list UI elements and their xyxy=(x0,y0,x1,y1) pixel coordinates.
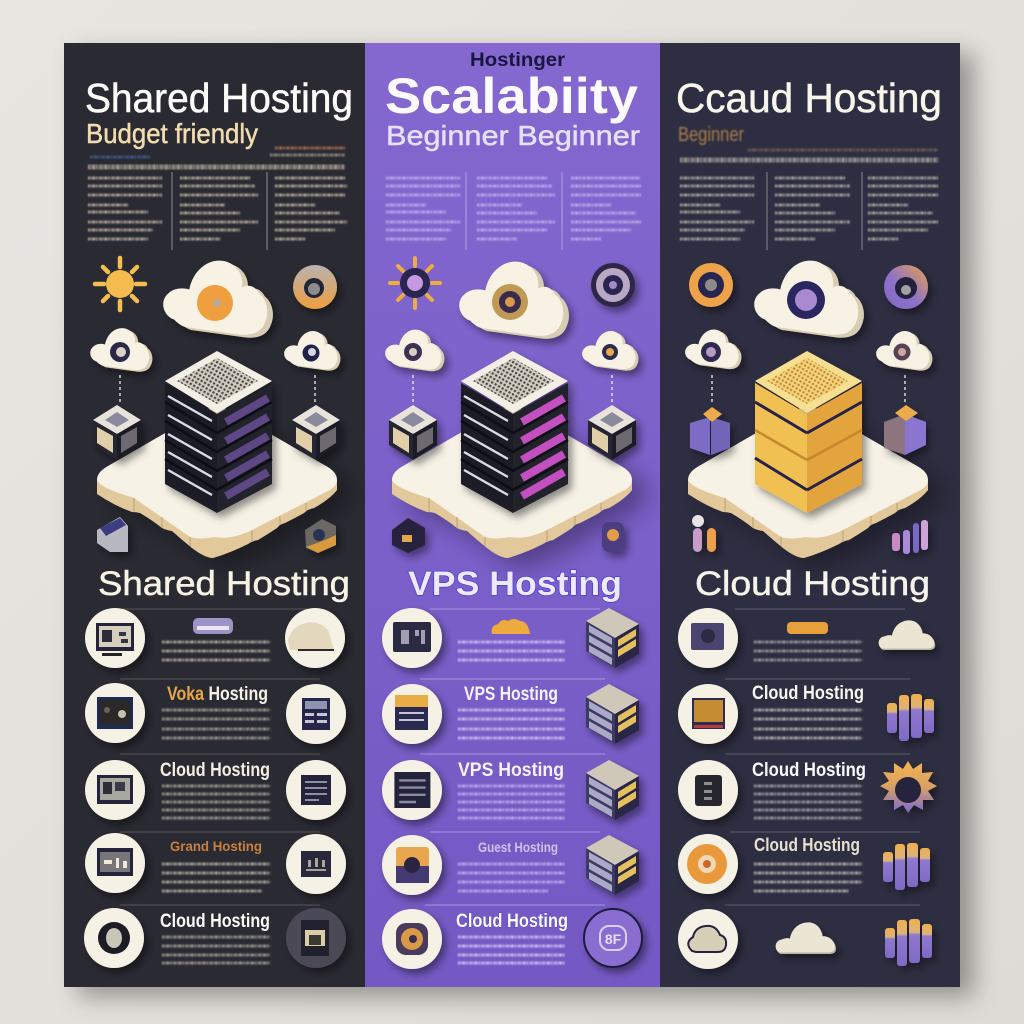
connector lines xyxy=(120,375,315,402)
intro text lines xyxy=(680,150,938,160)
icon: dark sun xyxy=(390,258,440,308)
subheading: Beginner: Beginner xyxy=(678,124,744,146)
icon: server tower xyxy=(461,351,568,513)
heading: Cloud Hosting label: Cloud Hosting xyxy=(695,565,930,603)
three-column body text xyxy=(88,178,347,239)
icon: small clouds xyxy=(685,330,932,371)
row: VPS 2 xyxy=(382,684,639,744)
icon: orange eye disc xyxy=(689,263,733,307)
connector lines xyxy=(712,375,905,402)
icon: sun xyxy=(95,258,145,310)
icon: large cloud xyxy=(754,261,864,338)
three-column body text xyxy=(386,178,641,239)
icon: small server cubes xyxy=(93,405,340,460)
row dividers xyxy=(725,609,920,905)
row: VPS 5 xyxy=(382,909,642,969)
icon: small clouds xyxy=(385,330,638,371)
intro text lines xyxy=(88,148,345,167)
icon: gold server tower xyxy=(755,351,862,513)
row: cloud 3: Cloud Hosting xyxy=(752,760,866,781)
column dividers xyxy=(767,172,862,250)
heading: Shared Hosting: Shared Hosting xyxy=(85,75,353,121)
row: cloud 4: Cloud Hosting xyxy=(754,835,860,855)
row: VPS 4 xyxy=(382,835,639,895)
row: cloud 1 xyxy=(678,608,935,668)
row: VPS 2: VPS Hosting xyxy=(464,684,558,705)
icon: small server cubes xyxy=(389,405,636,460)
panel: shared hosting column xyxy=(64,43,365,987)
three-column body text xyxy=(680,178,938,239)
icon: purple eye disc xyxy=(884,265,928,309)
row: VPS 5: Cloud Hosting xyxy=(456,911,568,932)
subheading: Budget friendly: Budget friendly xyxy=(86,118,258,149)
row: shared 4 xyxy=(85,833,346,894)
row: VPS 3: VPS Hosting xyxy=(458,760,564,781)
row: shared 3: Cloud Hosting xyxy=(160,760,270,781)
column dividers xyxy=(172,172,267,250)
row: shared 1 xyxy=(85,608,345,668)
row: shared 3 xyxy=(85,760,346,820)
icon: corner pills xyxy=(692,515,928,554)
row: cloud 5 xyxy=(678,909,932,969)
row: cloud 2: Cloud Hosting xyxy=(752,683,864,704)
row: shared 4: Grand Hosting xyxy=(170,838,262,854)
row dividers xyxy=(120,609,320,905)
row: VPS 4: Guest Hosting xyxy=(478,839,558,855)
icon: small clouds xyxy=(90,328,340,372)
intro text line xyxy=(386,158,640,162)
heading: Shared Hosting label: Shared Hosting xyxy=(98,565,350,603)
row: VPS 3 xyxy=(382,760,639,820)
icon: platform xyxy=(392,407,632,558)
heading: Scalability: Scalabiity xyxy=(385,68,638,124)
panel: VPS hosting column xyxy=(365,43,660,987)
row: cloud 4 xyxy=(678,834,930,894)
heading: Ccaud Hosting: Ccaud Hosting xyxy=(676,75,942,121)
row: VPS 1 xyxy=(382,608,639,668)
icon: dark eye disc xyxy=(591,263,635,307)
row: shared 2 xyxy=(85,683,346,744)
row: cloud 3 xyxy=(678,760,937,820)
icon: corner boxes xyxy=(97,517,336,553)
row: shared 5: Cloud Hosting xyxy=(160,911,270,932)
row dividers xyxy=(420,609,605,905)
brand: Hostinger: Hostinger xyxy=(470,50,566,71)
icon: orange eye disc xyxy=(293,265,337,309)
row: shared 2: Voka Hosting xyxy=(167,684,268,705)
panel: cloud hosting column xyxy=(660,43,960,987)
column dividers xyxy=(466,172,562,250)
subheading: Beginner Beginner: Beginner Beginner xyxy=(386,120,640,151)
heading: VPS Hosting: VPS Hosting xyxy=(408,565,622,603)
icon: platform xyxy=(97,407,337,558)
icon: platform xyxy=(688,407,928,558)
icon: corner boxes xyxy=(392,518,624,553)
icon: server tower xyxy=(165,351,272,513)
row: shared 5 xyxy=(84,908,346,968)
row: VPS 5: 8F xyxy=(605,931,622,947)
icon: large cloud xyxy=(459,262,569,339)
connector lines xyxy=(413,375,612,402)
icon: purple boxes xyxy=(690,405,926,455)
row: cloud 2 xyxy=(678,683,934,744)
icon: large cloud xyxy=(163,261,273,338)
